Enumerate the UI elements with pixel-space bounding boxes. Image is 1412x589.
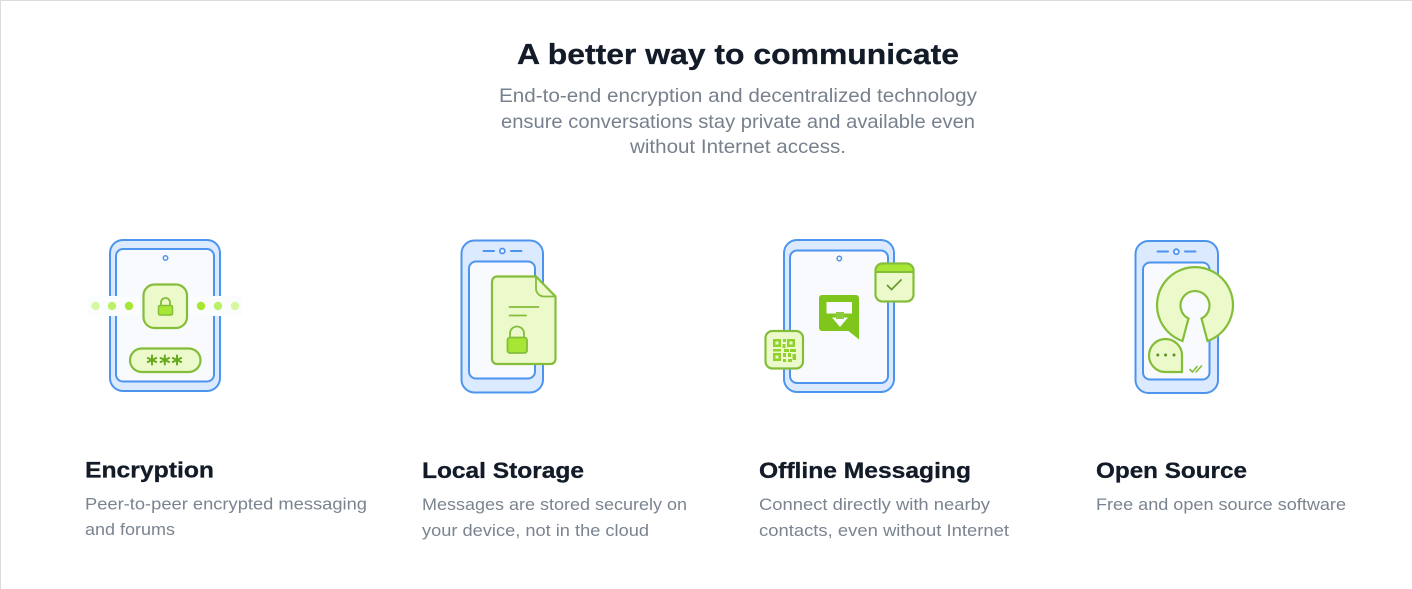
icon: calendar check card (876, 264, 914, 302)
feature: Local Storage: your device, not in the cloud (422, 521, 649, 540)
feature: Encryption: and forums (85, 520, 175, 539)
feature: Encryption (85, 458, 367, 539)
feature: Local Storage: Local Storage (422, 458, 584, 483)
title: A better way to communicate (517, 39, 959, 71)
feature: Open Source (1096, 458, 1346, 514)
feature: Local Storage (422, 458, 687, 540)
icon: chat bubble with checks (1149, 339, 1202, 372)
icon: encryption phone with lock (88, 240, 242, 391)
feature: Offline Messaging (759, 458, 1009, 540)
feature: Encryption: Encryption (85, 458, 214, 482)
subtitle text: without Internet access. (629, 136, 846, 158)
feature: Open Source: Open Source (1096, 458, 1247, 483)
feature: Open Source: Free and open source software (1096, 495, 1346, 514)
subtitle text: End-to-end encryption and decentralized technology (499, 85, 977, 107)
icon: local storage phone with document (462, 240, 556, 392)
subtitle text (499, 85, 977, 158)
feature: Offline Messaging: Connect directly with nearby (759, 495, 991, 514)
subtitle text: ensure conversations stay private and available even (501, 111, 975, 133)
icon: download chat bubble (819, 295, 859, 340)
icon: QR code card (766, 331, 803, 368)
feature: Offline Messaging: Offline Messaging (759, 458, 971, 483)
icon: offline messaging tablet (766, 240, 914, 392)
icon: open source logo (1157, 267, 1233, 341)
feature: Local Storage: Messages are stored securely on (422, 495, 687, 514)
icon: open source phone (1136, 241, 1233, 393)
feature: Offline Messaging: contacts, even without Internet (759, 521, 1009, 540)
feature: Encryption: Peer-to-peer encrypted messaging (85, 494, 367, 514)
